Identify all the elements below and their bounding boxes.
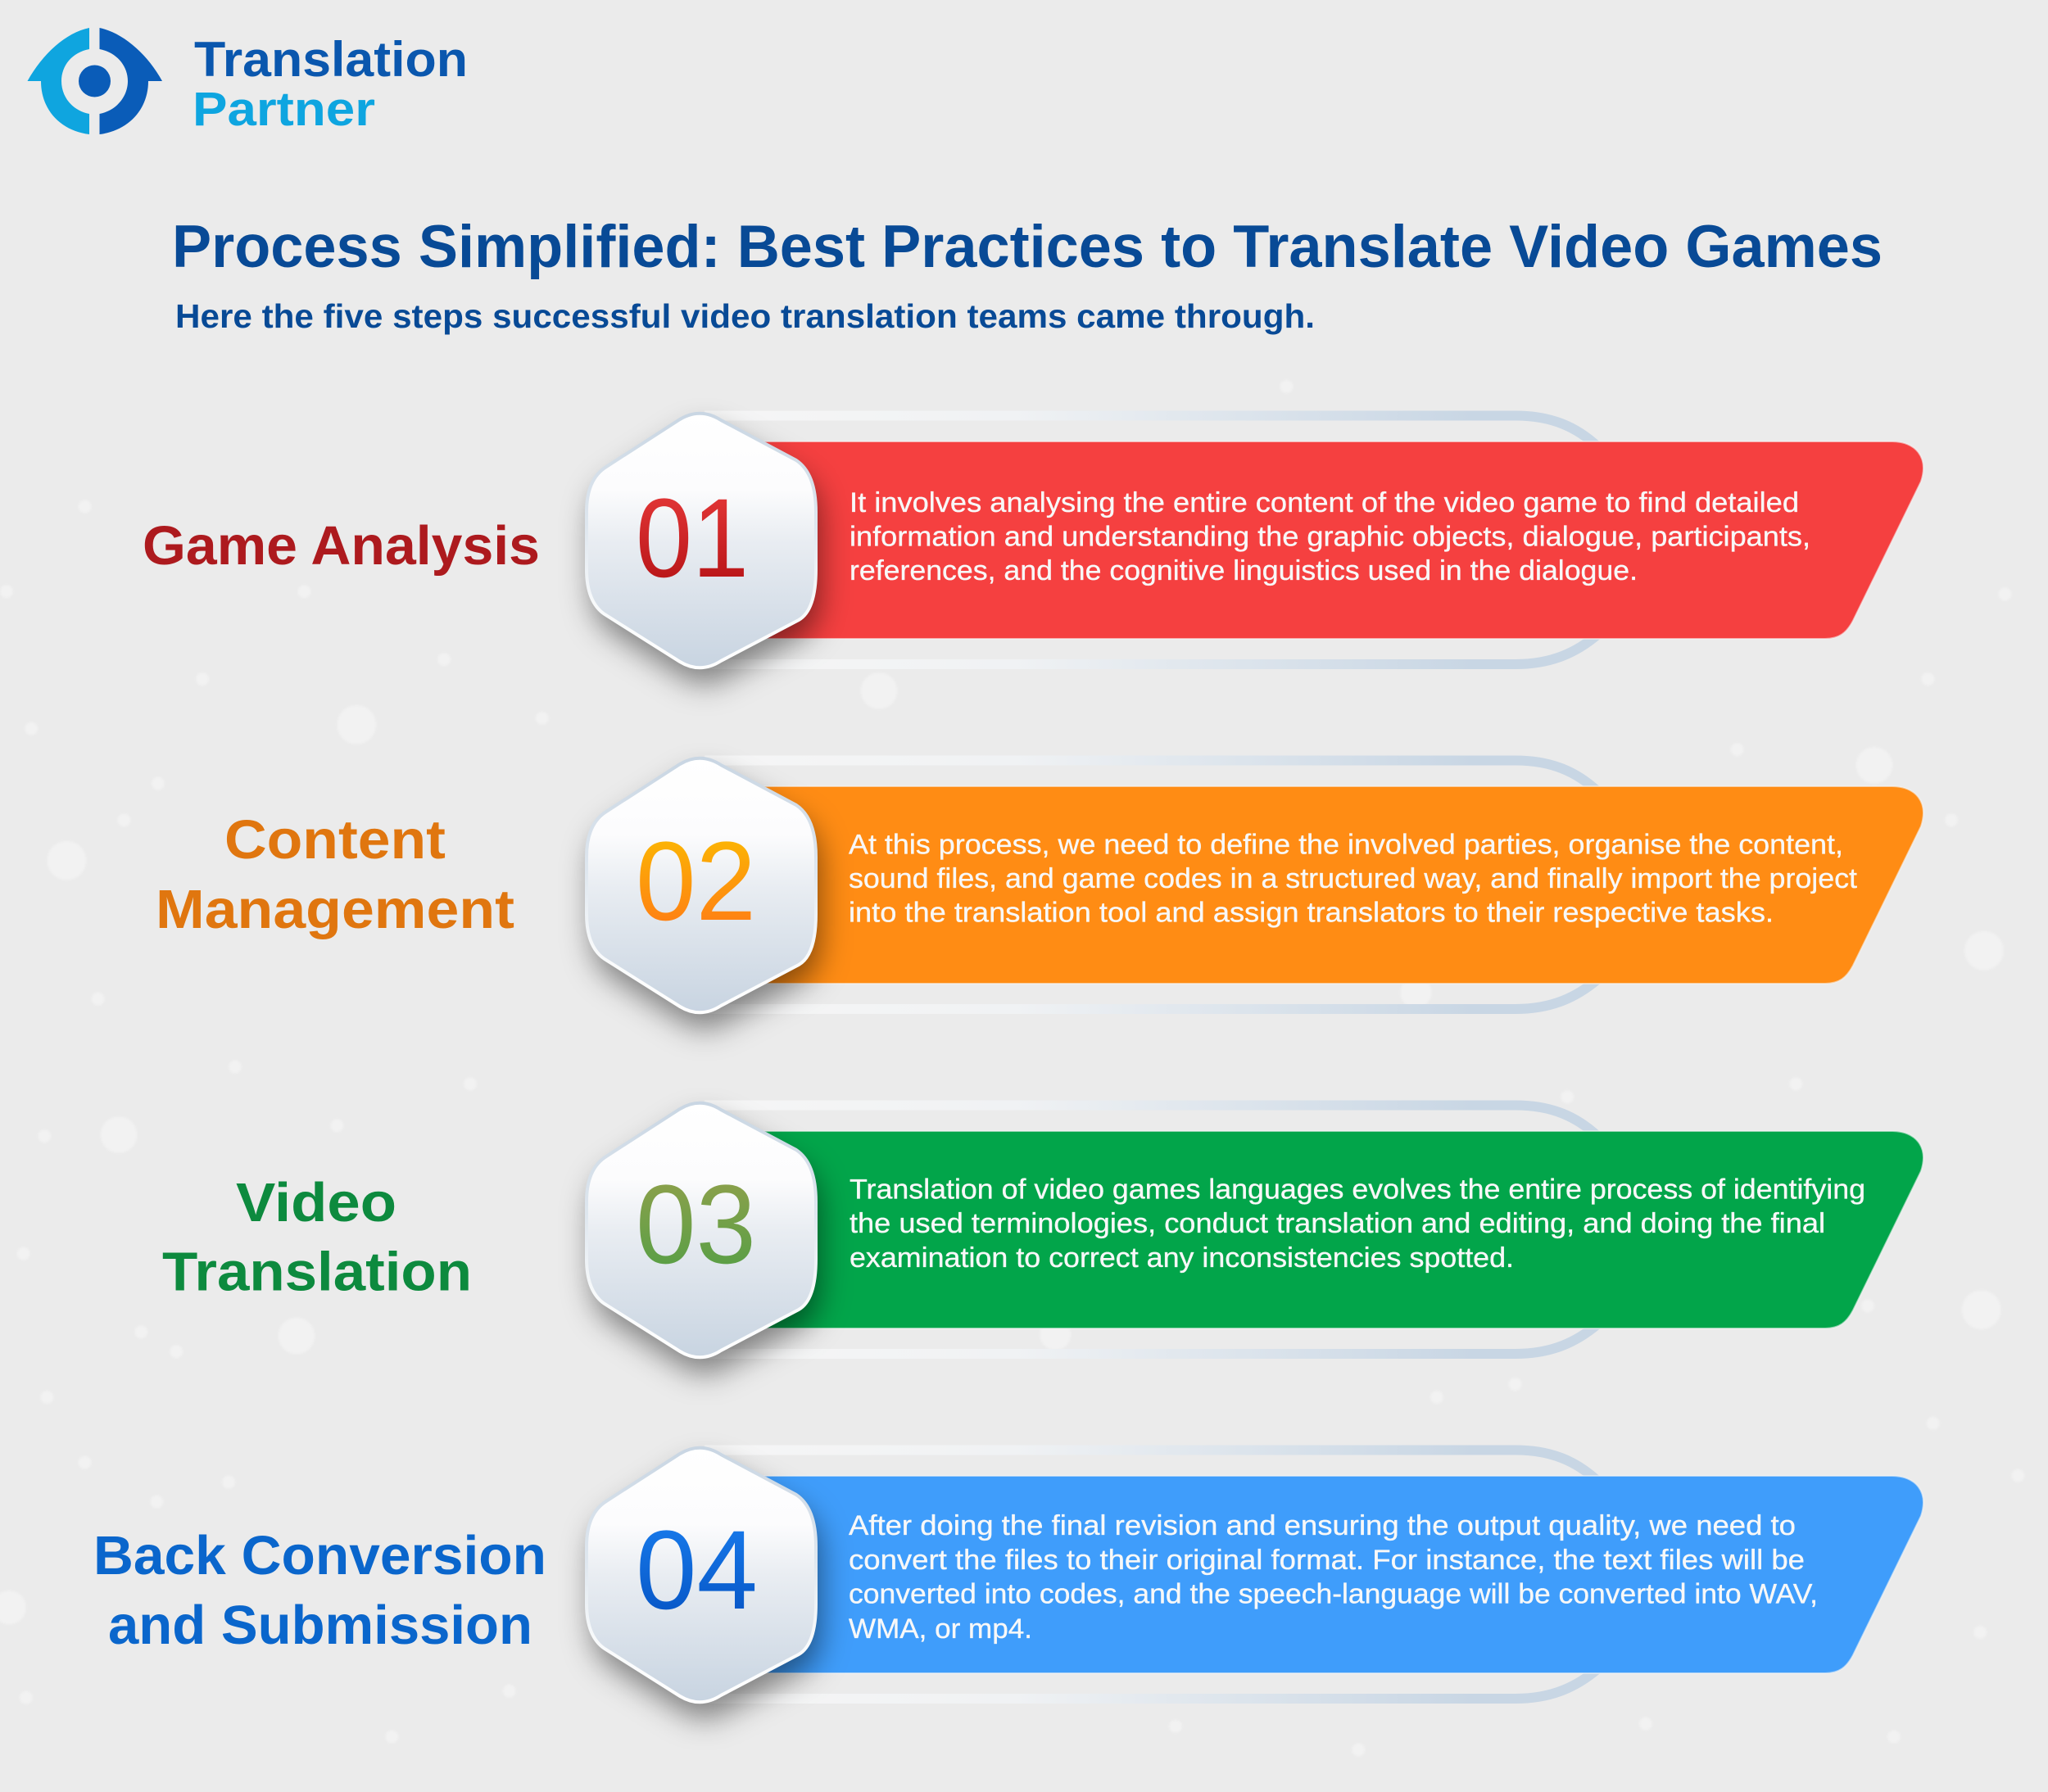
- label: Content Management: [156, 809, 514, 940]
- number 03: 03: [636, 1162, 756, 1287]
- label: Game Analysis: Game Analysis: [143, 515, 540, 577]
- ring outline: [705, 1450, 1597, 1699]
- label: Video Translation: Translation: [162, 1242, 472, 1302]
- hexagon badge: [587, 1103, 816, 1357]
- description text: Translation of video games languages evolves the entire process of identifying: [850, 1174, 1865, 1206]
- ring outline: [705, 1106, 1597, 1354]
- logo wordmark: Partner: [193, 83, 375, 136]
- step 1: [143, 414, 1923, 684]
- label: Back Conversion and Submission: [93, 1525, 546, 1656]
- bar: red: [705, 441, 1923, 639]
- description text: the used terminologies, conduct translation and editing, and doing the final: [850, 1208, 1825, 1239]
- number 04: 04: [636, 1508, 758, 1633]
- description text: [849, 1510, 1818, 1645]
- description text: information and understanding the graphic objects, dialogue, participants,: [850, 521, 1810, 552]
- description text: After doing the final revision and ensuring the output quality, we need to: [849, 1510, 1796, 1541]
- description text: converted into codes, and the speech-language will be converted into WAV,: [849, 1579, 1818, 1610]
- description text: references, and the cognitive linguistics used in the dialogue.: [850, 555, 1638, 586]
- logo wordmark: [193, 32, 468, 136]
- hexagon shadow: [591, 430, 821, 684]
- step 3: [162, 1103, 1923, 1373]
- label: Content Management: Content: [224, 809, 446, 871]
- bar: orange: [705, 786, 1923, 984]
- label: Back Conversion and Submission: Back Conversion: [93, 1525, 546, 1586]
- hexagon shadow: [591, 775, 821, 1029]
- ring outline: [705, 760, 1597, 1009]
- description text: [849, 829, 1857, 929]
- bar: green: [705, 1131, 1923, 1328]
- description text: WMA, or mp4.: [849, 1613, 1032, 1645]
- logo: [28, 28, 468, 136]
- description text: At this process, we need to define the involved parties, organise the content,: [849, 829, 1843, 860]
- description text: [850, 487, 1810, 586]
- description text: examination to correct any inconsistencies spotted.: [850, 1242, 1514, 1274]
- hexagon shadow: [591, 1120, 821, 1373]
- hexagon shadow: [591, 1464, 821, 1718]
- step 2: [156, 758, 1923, 1029]
- hexagon badge: [587, 1448, 816, 1702]
- title: Process Simplified: Best Practices to Translate Video Games: [172, 214, 1883, 280]
- subtitle: Here the five steps successful video translation teams came through.: [175, 297, 1315, 335]
- logo wordmark: Translation: [194, 32, 468, 87]
- step 4: [93, 1448, 1923, 1718]
- description text: into the translation tool and assign translators to their respective tasks.: [849, 898, 1774, 929]
- bar: blue: [705, 1476, 1923, 1673]
- label: Back Conversion and Submission: and Submission: [108, 1595, 532, 1656]
- background dots: [0, 380, 2024, 1756]
- label: Content Management: Management: [156, 879, 514, 940]
- icon: logo arrows and eye: [28, 28, 162, 134]
- label: Video Translation: Video: [236, 1172, 396, 1233]
- number 02: 02: [636, 819, 756, 944]
- description text: sound files, and game codes in a structured way, and finally import the project: [849, 863, 1857, 894]
- hexagon badge: [587, 758, 816, 1012]
- description text: convert the files to their original format. For instance, the text files will be: [849, 1545, 1805, 1576]
- number 01: 01: [636, 476, 749, 601]
- hexagon badge: [587, 414, 816, 667]
- description text: [850, 1174, 1865, 1274]
- label: Video Translation: [162, 1172, 472, 1302]
- ring outline: [705, 416, 1597, 664]
- description text: It involves analysing the entire content of the video game to find detailed: [850, 487, 1799, 518]
